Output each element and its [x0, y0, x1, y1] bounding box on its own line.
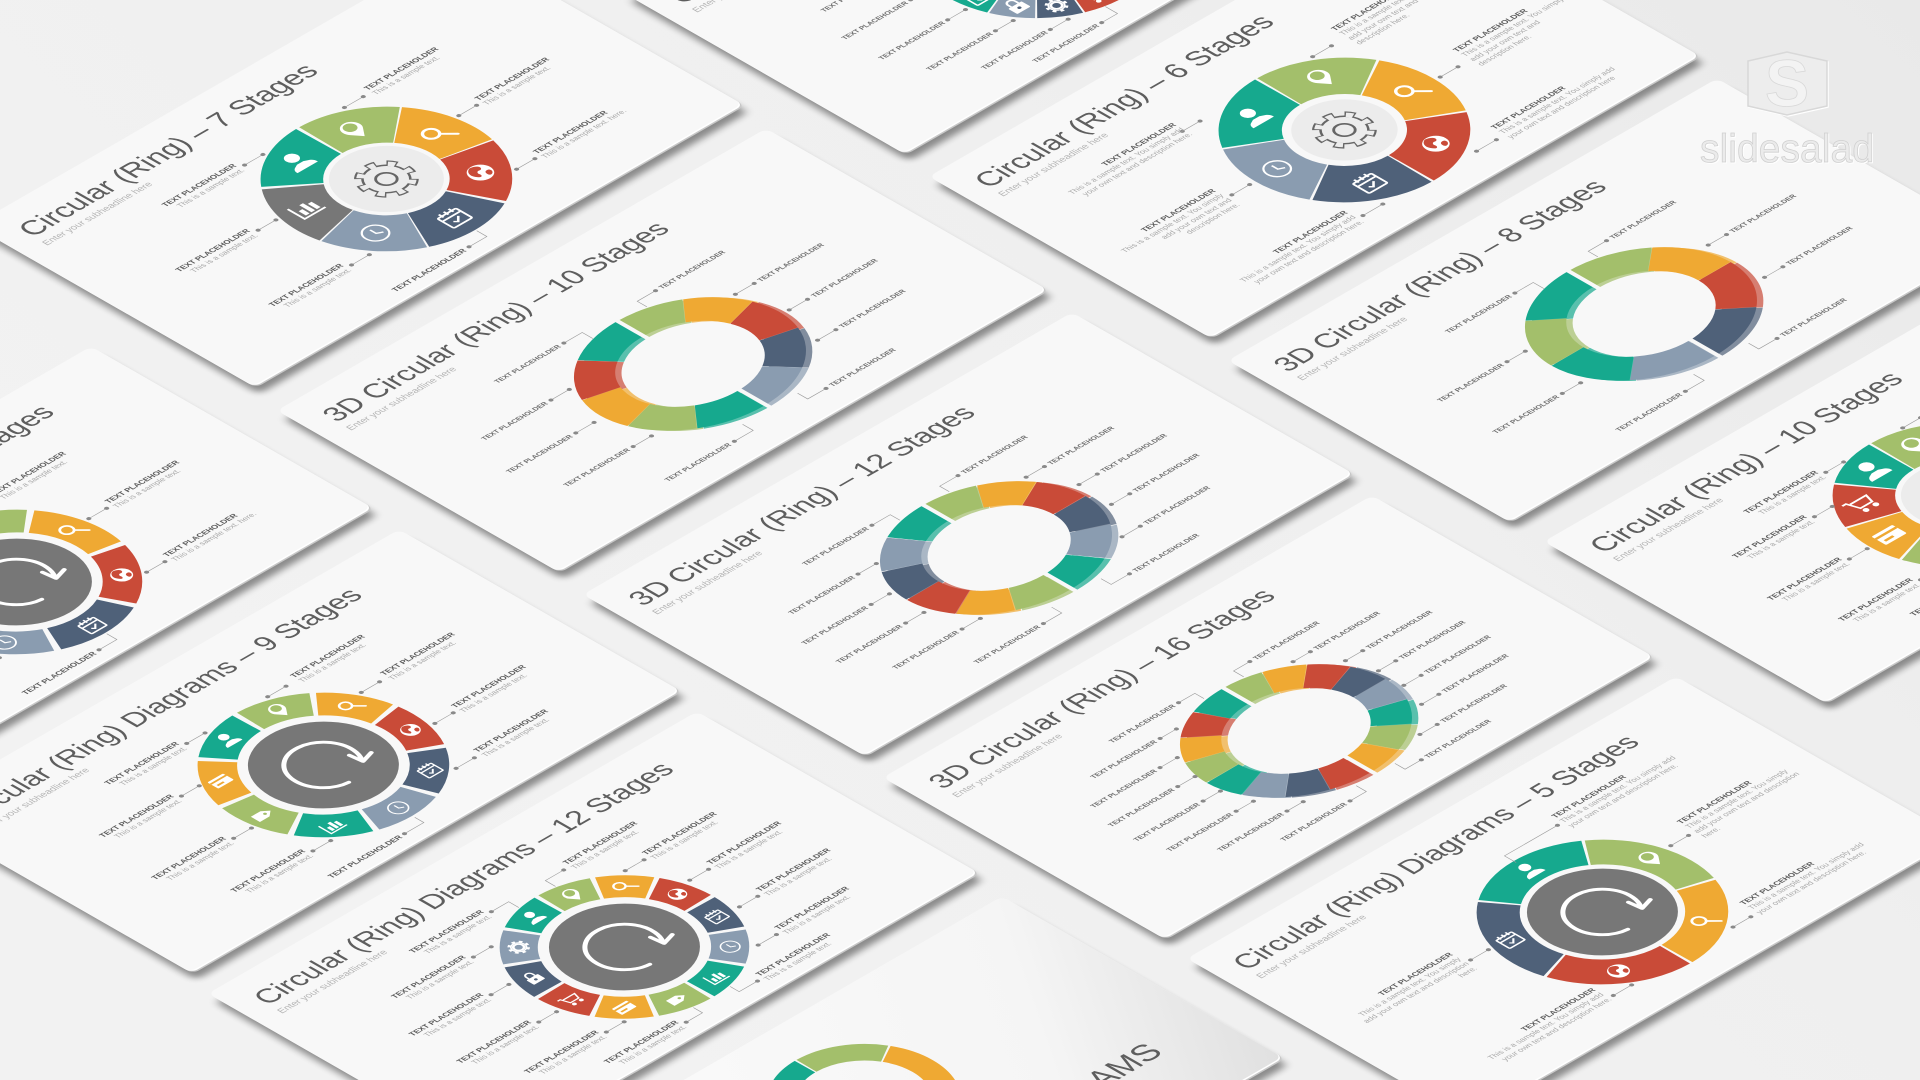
callout labels: This is a sample text. here.	[539, 108, 629, 160]
callout labels: This is a sample text.	[112, 798, 184, 840]
callout labels: TEXT PLACEHOLDER	[1444, 294, 1514, 335]
panel: slide 7 stages	[0, 0, 752, 394]
callout labels	[1381, 162, 1914, 469]
callout labels: TEXT PLACEHOLDER	[1107, 788, 1177, 828]
panel: slide diagrams 9 stages	[0, 530, 689, 980]
title: 3D Circular (Ring) – 8 Stages	[1265, 175, 1614, 376]
icons on segments	[961, 0, 1111, 39]
callout labels: TEXT PLACEHOLDER	[1441, 654, 1511, 694]
callout labels: TEXT PLACEHOLDER	[378, 631, 457, 677]
callout labels: TEXT PLACEHOLDER	[97, 793, 176, 839]
panel: slide diagrams 5 stages	[1183, 677, 1920, 1080]
callout labels: TEXT PLACEHOLDER	[960, 435, 1030, 475]
callout labels: description here.	[1184, 202, 1242, 235]
callout labels: This is a sample text.	[188, 232, 260, 274]
callout labels: TEXT PLACEHOLDER	[449, 664, 528, 709]
callout labels: TEXT PLACEHOLDER	[1100, 433, 1169, 474]
subtitle: Enter your subheadline here	[1295, 316, 1411, 382]
callout labels: TEXT PLACEHOLDER	[1675, 780, 1754, 825]
callout labels: TEXT PLACEHOLDER	[1609, 200, 1679, 240]
callout labels: TEXT PLACEHOLDER	[810, 258, 880, 299]
callout labels: here.	[1456, 965, 1479, 979]
callout labels: This is a sample text. You simply	[1683, 768, 1790, 830]
panel: cover slide, cut off at bottom	[509, 897, 1292, 1080]
callout labels: description here.	[1353, 12, 1412, 46]
callout labels: your own text and description here.	[1499, 996, 1614, 1062]
ring chart: visible lower segments	[825, 0, 1248, 67]
title: 3D Circular (Ring) – 16 Stages	[920, 584, 1282, 793]
callout labels: here.	[1699, 826, 1723, 839]
ring chart: thin ring	[704, 1007, 1024, 1080]
callout labels: TEXT PLACEHOLDER	[1280, 802, 1349, 842]
callout labels: TEXT PLACEHOLDER	[1166, 813, 1235, 853]
callout labels: This is a sample text.	[111, 468, 183, 509]
callout labels: TEXT PLACEHOLDER	[20, 650, 99, 696]
callout labels	[806, 0, 1121, 107]
watermark: logo and wordmark: S	[1765, 46, 1809, 120]
callout labels: This is a sample text.	[281, 267, 354, 309]
callout labels: your own text and description here	[1505, 75, 1618, 140]
callout labels: TEXT PLACEHOLDER	[1785, 226, 1855, 266]
callout labels	[1678, 412, 1920, 655]
callout labels: add your own text and description	[1361, 961, 1471, 1024]
callout labels: This is a sample text. You simply add	[1066, 126, 1187, 196]
callout labels: TEXT PLACEHOLDER	[705, 820, 784, 866]
callout labels: TEXT PLACEHOLDER	[835, 624, 905, 665]
watermark: logo and wordmark: slidesalad	[1700, 127, 1874, 171]
title: Circular (Ring) – 6 Stages	[967, 11, 1282, 192]
callout labels: TEXT PLACEHOLDER	[1424, 719, 1493, 759]
subtitle: Enter your subheadline here	[996, 132, 1112, 198]
callout labels: This is a sample text.	[422, 996, 494, 1038]
ring chart: 12 segments with dark hub	[419, 829, 830, 1065]
callout labels: This is a sample text.	[537, 1034, 609, 1076]
callout labels: This is a sample text. You simply add	[1558, 755, 1678, 824]
callout labels: TEXT PLACEHOLDER	[787, 575, 857, 616]
ring chart: 7 segments with dark hub	[0, 460, 228, 703]
callout labels	[732, 394, 1272, 705]
callout labels: This is a sample text.	[370, 54, 442, 96]
callout labels: TEXT PLACEHOLDER	[1615, 393, 1685, 433]
callout labels: TEXT PLACEHOLDER	[407, 992, 486, 1037]
callout labels: TEXT PLACEHOLDER	[1492, 395, 1561, 435]
title: Circular (Ring) Diagrams – 5 Stages	[1224, 730, 1646, 974]
callout labels: TEXT PLACEHOLDER	[1132, 453, 1202, 493]
callout labels: TEXT PLACEHOLDER	[1047, 426, 1116, 466]
icons on segments	[465, 856, 782, 1038]
callout labels: TEXT PLACEHOLDER	[522, 1029, 601, 1075]
subtitle: Enter your subheadline here	[1611, 497, 1727, 563]
callout labels: TEXT PLACEHOLDER	[973, 625, 1043, 665]
callout labels: TEXT PLACEHOLDER	[1398, 620, 1468, 660]
callout labels: TEXT PLACEHOLDER	[640, 811, 719, 856]
subtitle: Enter your subheadline here	[40, 181, 156, 247]
icons on segments	[0, 491, 181, 668]
callout labels: add your own text and description	[1691, 771, 1802, 834]
title: Circular (Ring) – 7 Stages	[11, 60, 326, 241]
callout labels: This is a sample text.	[117, 745, 189, 787]
callout labels	[110, 19, 677, 345]
subtitle: Enter your subheadline here	[1254, 914, 1370, 980]
callout labels: TEXT PLACEHOLDER	[754, 932, 832, 977]
callout labels: TEXT PLACEHOLDER	[1836, 577, 1915, 622]
callout labels: TEXT PLACEHOLDER	[531, 109, 610, 155]
callout labels: TEXT PLACEHOLDER	[1252, 621, 1322, 661]
title: Circular (Ring) – 10 Stages	[1582, 368, 1911, 557]
callout labels: TEXT PLACEHOLDER	[1519, 987, 1598, 1032]
callout labels: This is a sample text.	[569, 829, 641, 870]
panel: slide 3D 8 stages	[1224, 79, 1920, 529]
title: Circular (Ring) Diagrams – 12 Stages	[245, 758, 681, 1009]
callout labels: your own text and description here.	[1566, 762, 1680, 829]
callout labels: TEXT PLACEHOLDER	[326, 834, 405, 880]
callout labels: TEXT PLACEHOLDER	[801, 606, 870, 646]
callout labels: This is a sample text.	[480, 717, 552, 758]
callout labels: This is a sample text.	[781, 894, 853, 935]
icons on segments	[1803, 434, 1920, 583]
callout labels: your own text and description here.	[1754, 849, 1869, 915]
panel: slide 6 stages	[925, 0, 1708, 345]
callout labels: This is a sample text. You simply add	[1746, 841, 1866, 911]
ring chart: 6 segments with gear hub	[1162, 25, 1527, 235]
callout labels: TEXT PLACEHOLDER	[1549, 774, 1628, 819]
callout labels: TEXT PLACEHOLDER	[1440, 684, 1509, 724]
callout labels: TEXT PLACEHOLDER	[757, 243, 826, 283]
callout labels: This is a sample text.	[296, 642, 369, 684]
callout labels: This is a sample text. You simply add	[1238, 214, 1358, 284]
ring chart: 10 segments with gear hub	[1771, 387, 1920, 603]
callout labels	[1031, 0, 1661, 308]
callout labels: TEXT PLACEHOLDER	[267, 262, 346, 308]
3D ring chart: 10 segments	[502, 254, 884, 474]
callout labels: TEXT PLACEHOLDER	[103, 459, 182, 505]
callout labels: This is a sample text.	[243, 853, 316, 894]
subtitle: Enter your subheadline here	[950, 733, 1066, 799]
panel: slide 3D 12 stages	[579, 313, 1362, 763]
callout labels: description here.	[1475, 33, 1534, 67]
callout labels: TEXT PLACEHOLDER	[801, 527, 871, 567]
callout labels: TEXT PLACEHOLDER	[1313, 611, 1382, 651]
subtitle: Enter your subheadline here	[344, 366, 460, 432]
3D ring chart: 12 segments	[813, 441, 1186, 655]
callout labels	[335, 778, 915, 1080]
callout labels: TEXT PLACEHOLDER	[473, 56, 552, 102]
callout labels: TEXT PLACEHOLDER	[561, 820, 640, 866]
callout labels: TEXT PLACEHOLDER	[754, 847, 833, 893]
callout labels: This is a sample text.	[404, 959, 476, 1001]
callout labels	[1277, 722, 1904, 1080]
callout labels: TEXT PLACEHOLDER	[563, 448, 632, 488]
callout labels: TEXT PLACEHOLDER	[1365, 610, 1435, 650]
callout labels: TEXT PLACEHOLDER	[149, 835, 228, 881]
callout labels: TEXT PLACEHOLDER	[288, 633, 367, 679]
ring chart: 9 segments with dark hub	[112, 643, 535, 887]
callout labels: This is a sample text. here.	[169, 511, 259, 563]
callout labels: This is a sample text.	[386, 640, 459, 681]
callout labels: TEXT PLACEHOLDER	[454, 1019, 533, 1065]
callout labels: TEXT PLACEHOLDER	[493, 344, 563, 385]
callout labels: This is a sample text.	[457, 672, 530, 714]
ring chart: 7 segments with gear hub	[198, 71, 574, 287]
callout labels: This is a sample text.	[1780, 561, 1852, 602]
callout labels: TEXT PLACEHOLDER	[161, 512, 240, 558]
callout labels: TEXT PLACEHOLDER	[664, 443, 734, 483]
callout labels: This is a sample text.	[175, 167, 247, 209]
callout labels: This is a sample text.	[1756, 474, 1829, 516]
callout labels: TEXT PLACEHOLDER	[892, 630, 961, 671]
callout labels: TEXT PLACEHOLDER	[1779, 298, 1849, 338]
callout labels: This is a sample text.	[617, 1024, 689, 1066]
callout labels: TEXT PLACEHOLDER	[1032, 24, 1101, 64]
callout labels: This is a sample text.	[648, 819, 720, 861]
callout labels: TEXT PLACEHOLDER	[480, 401, 550, 442]
callout labels: TEXT PLACEHOLDER	[1139, 188, 1218, 233]
ring chart: 5 segments with dark hub	[1396, 793, 1809, 1031]
callout labels: This is a sample text.	[1745, 519, 1817, 560]
callout labels: TEXT PLACEHOLDER	[1090, 740, 1159, 780]
callout labels: This is a sample text.	[713, 829, 785, 870]
callout labels: TEXT PLACEHOLDER	[1376, 951, 1455, 997]
callout labels: TEXT PLACEHOLDER	[160, 163, 239, 208]
subtitle: Enter your subheadline here	[275, 949, 391, 1015]
callout labels: TEXT PLACEHOLDER	[1099, 122, 1178, 167]
panel: slide 16 stages, cut off at top	[619, 0, 1402, 161]
icons on segments	[1199, 46, 1489, 213]
callout labels: TEXT PLACEHOLDER	[602, 1019, 681, 1065]
callout labels: TEXT PLACEHOLDER	[389, 954, 468, 1000]
subtitle: Enter your subheadline here	[650, 550, 766, 616]
callout labels: TEXT PLACEHOLDER	[828, 348, 898, 388]
callout labels: This is a sample text. You simply add	[1497, 66, 1617, 135]
callout labels: TEXT PLACEHOLDER	[1730, 514, 1809, 559]
callout labels: TEXT PLACEHOLDER	[1738, 861, 1817, 906]
title: 3D Circular (Ring) – 10 Stages	[314, 217, 676, 426]
icons on segments	[1442, 820, 1747, 996]
callout labels: TEXT PLACEHOLDER	[1132, 533, 1202, 573]
panel: slide diagrams 12 stages	[204, 712, 987, 1080]
callout labels: TEXT PLACEHOLDER	[1436, 363, 1506, 403]
icons on segments	[164, 673, 487, 859]
callout labels: TEXT PLACEHOLDER	[390, 247, 469, 293]
callout labels: TEXT PLACEHOLDER	[1729, 194, 1799, 234]
callout labels: TEXT PLACEHOLDER	[878, 21, 947, 61]
callout labels	[421, 210, 967, 524]
callout labels: TEXT PLACEHOLDER	[1271, 209, 1350, 255]
callout labels: add your own text and	[1159, 197, 1234, 240]
callout labels: TEXT PLACEHOLDER	[1423, 635, 1493, 675]
callout labels: your own text and description here.	[1251, 219, 1366, 285]
callout labels: TEXT PLACEHOLDER	[838, 289, 908, 329]
panel: slide 3D 10 stages	[273, 129, 1056, 579]
callout labels: add your own text and	[1467, 19, 1543, 62]
callout labels: This is a sample text.	[762, 940, 834, 982]
callout labels: This is a sample text. You simply	[1119, 192, 1226, 254]
watermark: logo and wordmark	[1700, 46, 1874, 171]
3D ring chart: 8 segments	[1451, 203, 1837, 425]
callout labels: This is a sample text.	[422, 914, 494, 955]
title: 3D Circular (Ring) – 12 Stages	[620, 401, 982, 610]
panel: slide 3D 16 stages	[879, 496, 1662, 946]
callout labels	[43, 602, 615, 931]
icons on segments	[240, 95, 538, 266]
callout labels: TEXT PLACEHOLDER	[229, 848, 308, 894]
panel: slide diagrams 7 stages, cut off at left	[0, 347, 381, 797]
callout labels: TEXT PLACEHOLDER	[1108, 704, 1178, 744]
callout labels: TEXT PLACEHOLDER	[1133, 802, 1202, 843]
callout labels: This is a sample text.	[481, 65, 553, 106]
callout labels: This is a sample text.	[164, 840, 236, 882]
callout labels: TEXT PLACEHOLDER	[841, 1, 910, 41]
callout labels: TEXT PLACEHOLDER	[173, 228, 252, 273]
callout labels: This is a sample text. You simply add	[1486, 991, 1606, 1061]
callout labels: TEXT PLACEHOLDER	[1451, 8, 1530, 53]
callout labels: TEXT PLACEHOLDER	[407, 909, 486, 954]
callout labels: TEXT PLACEHOLDER	[1143, 486, 1212, 526]
callout labels: your own text and description here.	[1080, 131, 1195, 197]
3D ring chart: 16 segments	[1106, 620, 1492, 842]
callout labels: TEXT PLACEHOLDER	[1089, 769, 1159, 809]
callout labels: This is a sample text.	[762, 856, 834, 897]
callout labels: TEXT PLACEHOLDER	[1489, 85, 1568, 131]
callout labels: TEXT PLACEHOLDER	[362, 46, 441, 91]
callout labels: TEXT PLACEHOLDER	[772, 885, 851, 931]
callout labels	[1035, 579, 1567, 885]
callout labels: This is a sample text. You simply	[1356, 956, 1463, 1018]
callout labels: TEXT PLACEHOLDER	[1216, 812, 1286, 853]
callout labels: TEXT PLACEHOLDER	[1741, 469, 1820, 515]
callout labels: TEXT PLACEHOLDER	[980, 31, 1050, 71]
callout labels: TEXT PLACEHOLDER	[102, 741, 181, 786]
callout labels: TEXT PLACEHOLDER	[658, 250, 728, 290]
panel: slide 10 stages, cut off at right	[1540, 260, 1920, 710]
callout labels: TEXT PLACEHOLDER	[505, 434, 575, 475]
callout labels: TEXT PLACEHOLDER	[925, 32, 995, 72]
callout labels: TEXT PLACEHOLDER	[1765, 556, 1844, 602]
callout labels: TEXT PLACEHOLDER	[471, 708, 550, 754]
callout labels	[0, 422, 307, 696]
callout labels: This is a sample text.	[469, 1024, 542, 1065]
